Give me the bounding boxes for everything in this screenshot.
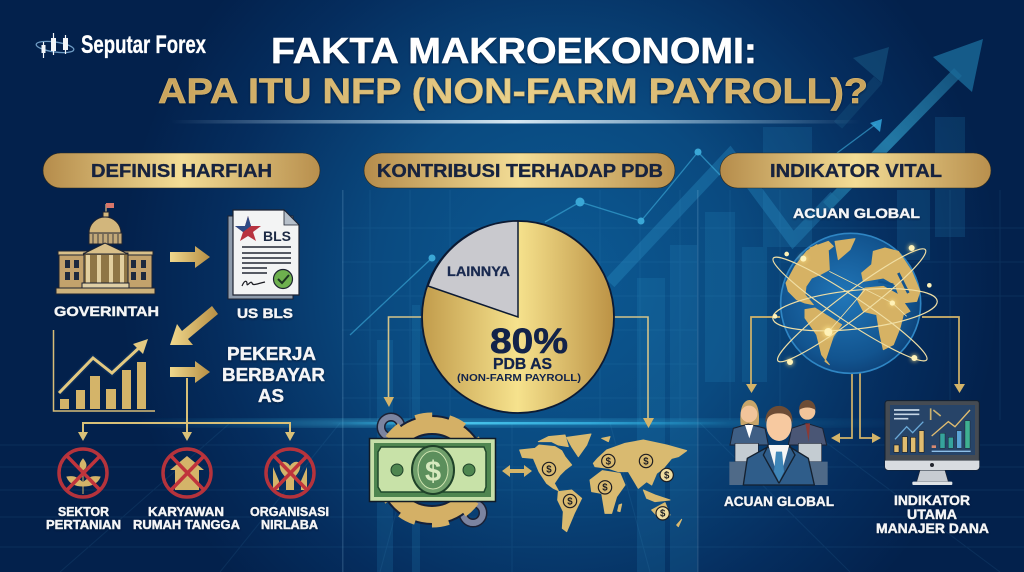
connectors from globe: [746, 317, 965, 443]
icon: world map with coins: $: [664, 470, 670, 481]
icon: no household workers: [163, 449, 211, 497]
section heading: Definisi Harfiah: [43, 153, 320, 188]
label: Pekerja Berbayar AS: AS: [258, 386, 284, 406]
icon: globe with orbits: [766, 233, 939, 373]
label: Acuan Global (bottom): ACUAN GLOBAL: [724, 493, 834, 509]
icon: gears and banknote: $: [425, 456, 441, 488]
label: Non-Farm Payroll: (NON-FARM PAYROLL): [457, 372, 581, 384]
title divider: [170, 120, 860, 124]
icon: world map with coins: $: [546, 464, 552, 475]
icon: rising bar chart: [54, 330, 155, 411]
label: Pekerja Berbayar AS: BERBAYAR: [222, 365, 325, 385]
label: Organisasi Nirlaba: ORGANISASI: [250, 505, 329, 519]
arrow: government to BLS: [170, 246, 210, 268]
arrow: chart to paid workers: [170, 361, 210, 383]
label: Sektor Pertanian: PERTANIAN: [46, 518, 121, 532]
icon: gears and banknote: [370, 417, 496, 523]
icon: no nonprofit: [266, 449, 314, 497]
icon: world map with coins: $: [602, 483, 608, 494]
icon: BLS document: [228, 210, 299, 299]
label: US BLS: US BLS: [237, 305, 293, 321]
label: Organisasi Nirlaba: [250, 505, 329, 532]
label: Indikator Utama Manajer Dana: MANAJER DANA: [876, 520, 989, 536]
label: Pekerja Berbayar AS: PEKERJA: [227, 344, 316, 364]
label: Karyawan Rumah Tangga: [133, 505, 240, 532]
icon: world map with coins: $: [567, 496, 573, 507]
icon: BLS document: BLS: [263, 228, 291, 244]
icon: world map with coins: $: [660, 509, 666, 520]
label: Pekerja Berbayar AS: [222, 344, 325, 406]
pie chart: [422, 221, 614, 413]
label: Lainnya: LAINNYA: [447, 263, 510, 279]
section heading: Kontribusi Terhadap PDB: [364, 153, 675, 188]
label: Indikator Utama Manajer Dana: UTAMA: [907, 506, 957, 522]
title: FAKTA MAKROEKONOMI:: [271, 30, 757, 71]
section heading: Indikator Vital: INDIKATOR VITAL: [770, 160, 942, 181]
label: Indikator Utama Manajer Dana: INDIKATOR: [894, 492, 970, 508]
value: 80%: 80%: [490, 322, 568, 361]
icon: government building: [56, 203, 155, 294]
label: Indikator Utama Manajer Dana: [876, 492, 989, 536]
panel: definisi harfiah: [46, 203, 329, 532]
label: Karyawan Rumah Tangga: KARYAWAN: [148, 505, 224, 519]
icon: business team: [729, 400, 828, 485]
connector tree: [78, 378, 295, 441]
icon: no agriculture: [59, 449, 107, 497]
label: Goverintah: GOVERINTAH: [54, 303, 159, 319]
icon: world map with coins: $: [606, 456, 612, 467]
label: Sektor Pertanian: [46, 505, 121, 532]
icon: world map with coins: [520, 434, 687, 532]
connectors from pie: [384, 317, 654, 428]
logo: Seputar Forex: Seputar Forex: [81, 31, 206, 59]
logo: Seputar Forex: [35, 31, 206, 59]
title: [158, 30, 868, 111]
section heading: Definisi Harfiah: DEFINISI HARFIAH: [91, 160, 272, 181]
section heading: Kontribusi Terhadap PDB: KONTRIBUSI TERHADAP PDB: [377, 160, 663, 181]
panel: indikator vital: [724, 205, 989, 536]
section heading: Indikator Vital: [720, 153, 991, 188]
panel: kontribusi PDB: [370, 221, 687, 532]
label: PDB AS: PDB AS: [493, 356, 552, 373]
title: APA ITU NFP (NON-FARM PAYROLL)?: [158, 72, 868, 111]
label: Karyawan Rumah Tangga: RUMAH TANGGA: [133, 518, 240, 532]
label: Organisasi Nirlaba: NIRLABA: [261, 518, 318, 532]
label: Sektor Pertanian: SEKTOR: [58, 505, 109, 519]
icon: monitor dashboard: [885, 401, 979, 485]
icon: world map with coins: $: [643, 456, 649, 467]
arrow: money to world: [502, 465, 532, 477]
arrow: BLS to chart: [170, 306, 218, 345]
label: Acuan Global (top): ACUAN GLOBAL: [793, 205, 920, 221]
